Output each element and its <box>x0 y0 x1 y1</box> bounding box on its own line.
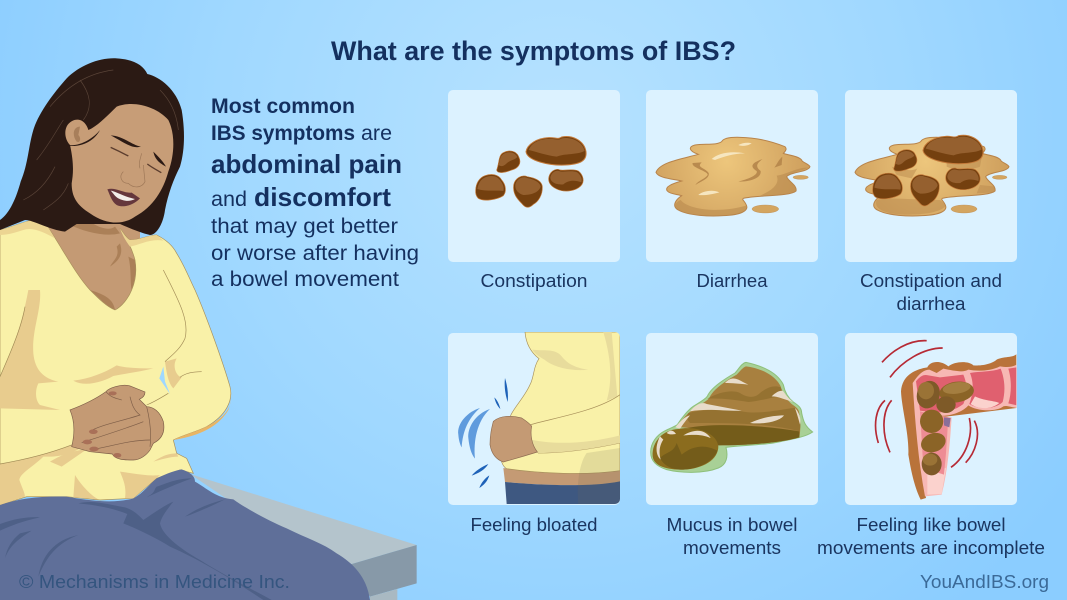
face <box>65 104 173 223</box>
panel: incomplete bowel movements <box>845 333 1017 505</box>
neck and chest <box>43 207 140 313</box>
intro text: abdominal pain <box>211 149 402 179</box>
label: constipation and diarrhea <box>860 271 1002 314</box>
icon: colon with trapped stool <box>876 341 1017 500</box>
icon: stool with mucus <box>651 362 813 472</box>
hands <box>70 385 164 460</box>
panel: diarrhea <box>646 90 818 262</box>
shirt <box>0 220 231 505</box>
intro text: IBS symptoms <box>211 122 355 145</box>
label: incomplete bowel movements <box>817 515 1045 558</box>
pants <box>0 469 370 600</box>
copyright: © Mechanisms in Medicine Inc. <box>19 572 290 592</box>
panel: constipation and diarrhea <box>845 90 1017 262</box>
panel: constipation <box>448 90 620 262</box>
illustration: woman holding abdomen <box>0 58 370 600</box>
label: diarrhea: Diarrhea <box>696 271 769 291</box>
website: YouAndIBS.org <box>920 572 1049 592</box>
label: mucus in bowel movements: movements <box>683 538 781 558</box>
icon: stool pieces in liquid <box>855 135 1009 216</box>
label: constipation: Constipation <box>480 271 588 291</box>
illustration: table <box>190 474 417 600</box>
label: constipation and diarrhea: diarrhea <box>896 294 967 314</box>
intro text: are <box>361 122 392 145</box>
icon: hard stool pieces <box>476 137 586 207</box>
label: constipation and diarrhea: Constipation and <box>860 271 1002 291</box>
intro text: and <box>211 188 247 211</box>
panel: feeling bloated <box>448 332 620 505</box>
hair <box>0 58 184 235</box>
label: incomplete bowel movements: Feeling like bowel <box>856 515 1006 535</box>
intro text <box>211 95 419 291</box>
title: What are the symptoms of IBS? <box>331 36 736 66</box>
label: feeling bloated: Feeling bloated <box>470 515 598 535</box>
panel: mucus in bowel movements <box>646 333 818 505</box>
intro text: Most common <box>211 95 355 118</box>
intro text: that may get better <box>211 215 398 238</box>
label: mucus in bowel movements: Mucus in bowel <box>666 515 798 535</box>
intro text: or worse after having <box>211 242 419 265</box>
icon: liquid stool puddle <box>656 137 810 216</box>
label: mucus in bowel movements <box>666 515 798 558</box>
intro text: discomfort <box>254 182 391 212</box>
label: incomplete bowel movements: movements are incomplete <box>817 538 1045 558</box>
intro text: a bowel movement <box>211 268 399 291</box>
icon: bloated belly with hand <box>458 332 620 504</box>
